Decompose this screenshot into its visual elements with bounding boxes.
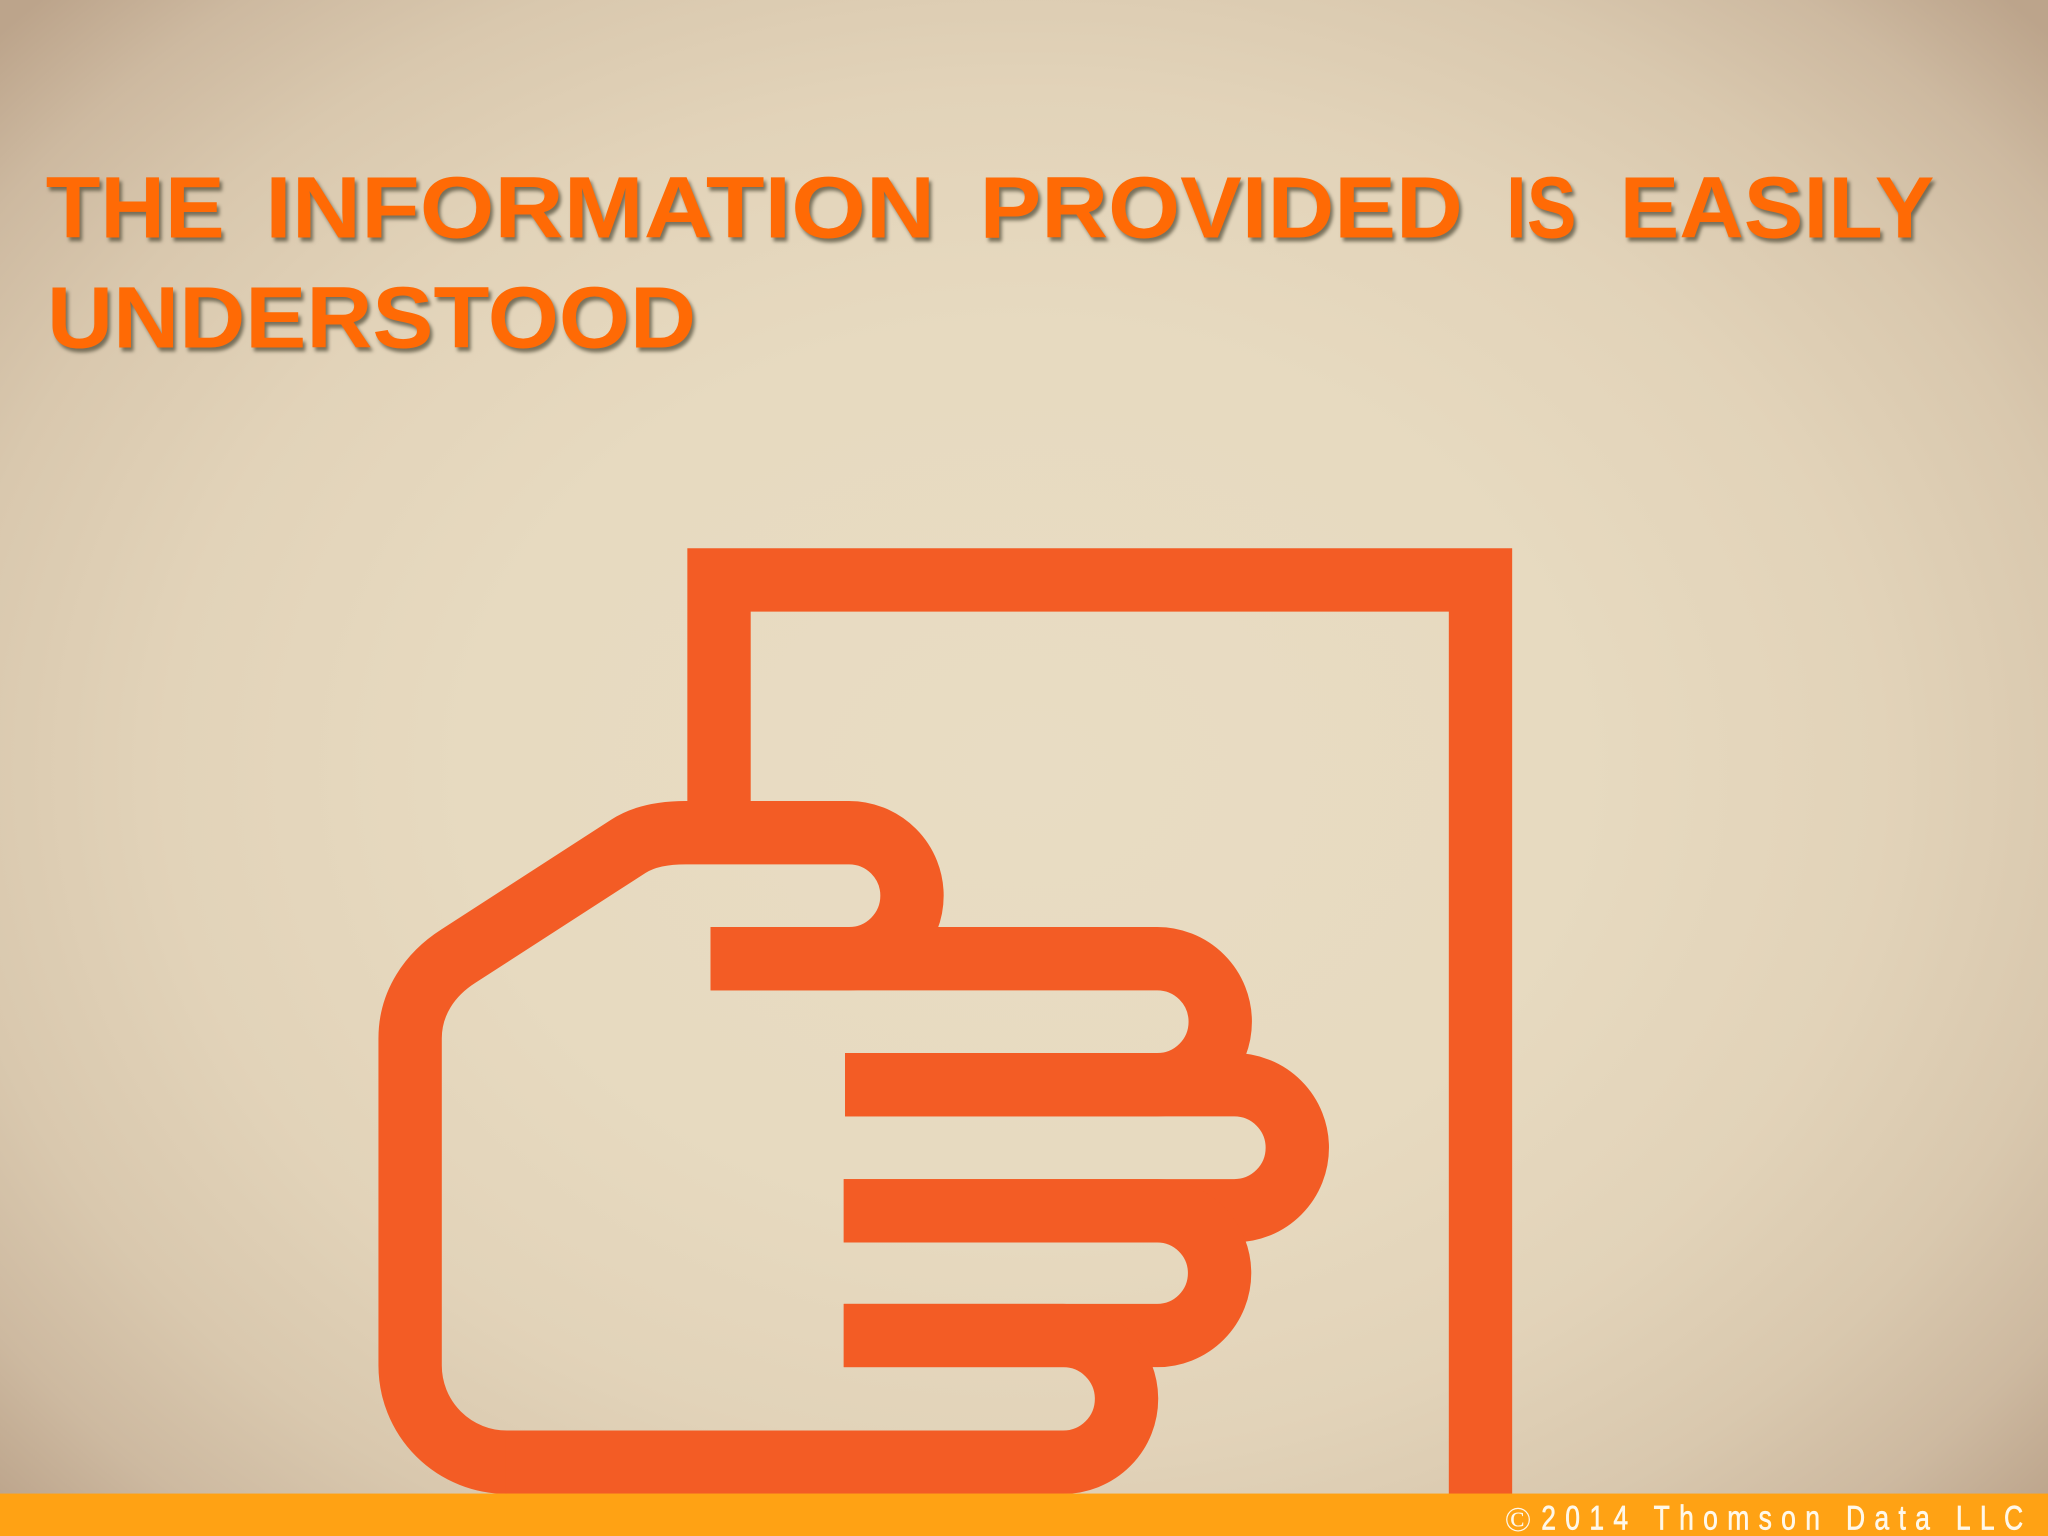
icon: hand holding a document (410, 580, 1480, 1496)
title: UNDERSTOOD (47, 268, 696, 366)
index finger (711, 959, 1220, 1085)
little finger (505, 1336, 1127, 1462)
hand back and thumb (410, 833, 912, 1462)
title (46, 159, 1934, 366)
title: EASILY (1620, 159, 1934, 257)
footer bar (0, 1494, 2048, 1536)
ring finger (844, 1211, 1220, 1336)
document outline (719, 580, 1480, 1496)
title: IS (1506, 159, 1576, 257)
title: PROVIDED (980, 159, 1463, 257)
middle finger (844, 1085, 1297, 1211)
title: THE (46, 159, 225, 257)
title: INFORMATION (265, 159, 935, 257)
